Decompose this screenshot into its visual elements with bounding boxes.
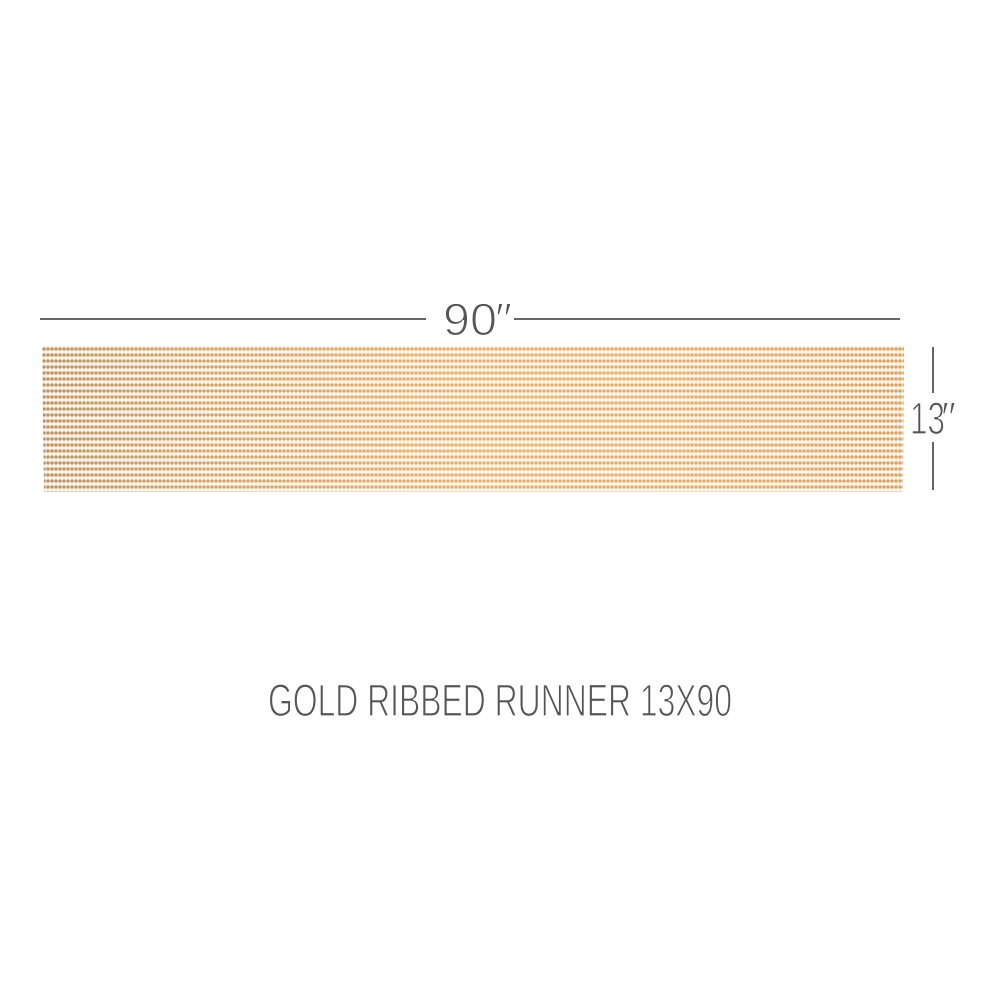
dimension: height 13 inches: 13 [910, 393, 945, 444]
dimension: width 90 inches: 90 [443, 294, 497, 345]
product: gold ribbed runner fabric [42, 346, 904, 492]
product title: GOLD RIBBED RUNNER 13X90 [268, 675, 732, 726]
dimension: height 13 inches [910, 347, 956, 490]
dimension: height 13 inches: ″ [941, 393, 956, 444]
dimension: width 90 inches [40, 294, 900, 345]
dimension: width 90 inches: ″ [495, 294, 512, 345]
